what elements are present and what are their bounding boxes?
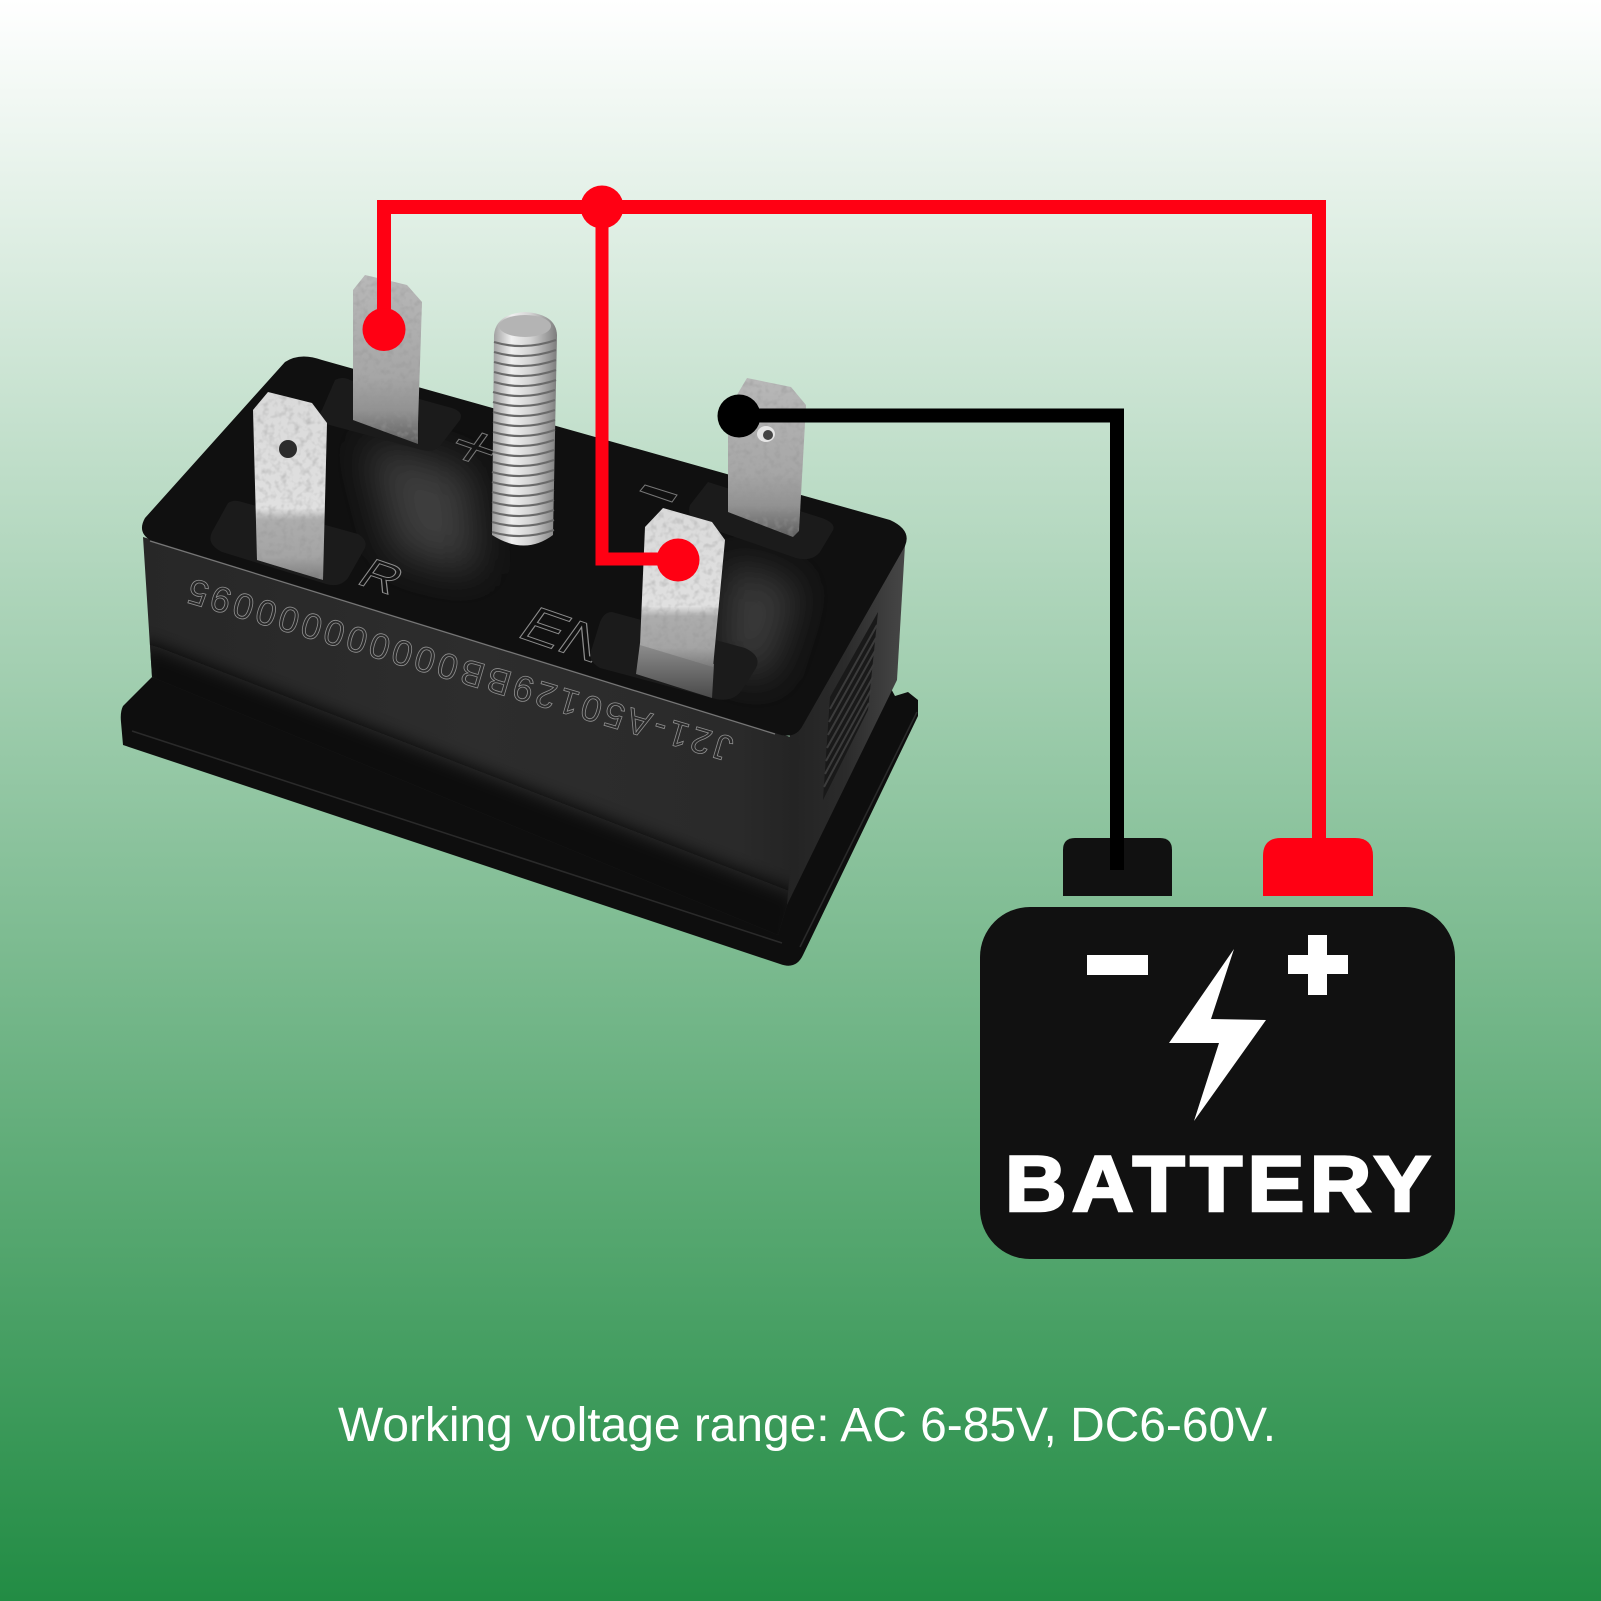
terminal base reflection [636, 643, 714, 698]
side vent panel [823, 612, 878, 800]
minus symbol [1087, 955, 1148, 975]
red junction node [580, 186, 624, 228]
meter front bezel [121, 650, 918, 966]
terminal recess: minus [689, 482, 834, 559]
terminal recess: EN [590, 612, 758, 700]
terminal: front left [253, 392, 327, 580]
terminal: back right [728, 378, 806, 537]
bezel edge highlights [132, 712, 917, 947]
engraved EN label: EN [508, 598, 624, 674]
black connection point: back right terminal [718, 394, 760, 438]
plus symbol [1288, 935, 1348, 995]
positive battery terminal [1263, 838, 1373, 896]
engraved serial number: J21-A50129BB000000000095 [183, 571, 737, 770]
top face front edge highlight [150, 541, 775, 734]
battery icon [980, 820, 1455, 1259]
red wire: battery positive to terminals [384, 207, 1319, 860]
lightning bolt [1169, 949, 1266, 1121]
meter housing right side [787, 530, 905, 905]
engraved R label: R [349, 551, 413, 603]
terminal recess: plus [320, 378, 461, 451]
terminal: back left [353, 275, 422, 444]
battery label: BATTERY [1005, 1141, 1431, 1228]
device photo: panel meter rear view [121, 275, 920, 966]
terminal recess: R [210, 501, 366, 585]
caption: working voltage range: Working voltage range: AC 6-85V, DC6-60V. [338, 1399, 1276, 1452]
black wire into terminal [1110, 820, 1124, 870]
battery body [980, 907, 1455, 1259]
red connection point: back left terminal [362, 308, 406, 351]
engraved plus sign: + [432, 410, 518, 485]
terminal: front right [640, 508, 725, 667]
negative battery terminal [1063, 838, 1172, 896]
threaded screw post [492, 312, 557, 546]
red connection point: EN terminal [656, 538, 700, 582]
black wire: battery negative [741, 416, 1117, 870]
meter housing top face [130, 350, 920, 745]
engraved minus sign [640, 485, 677, 502]
meter housing front face [143, 537, 790, 901]
